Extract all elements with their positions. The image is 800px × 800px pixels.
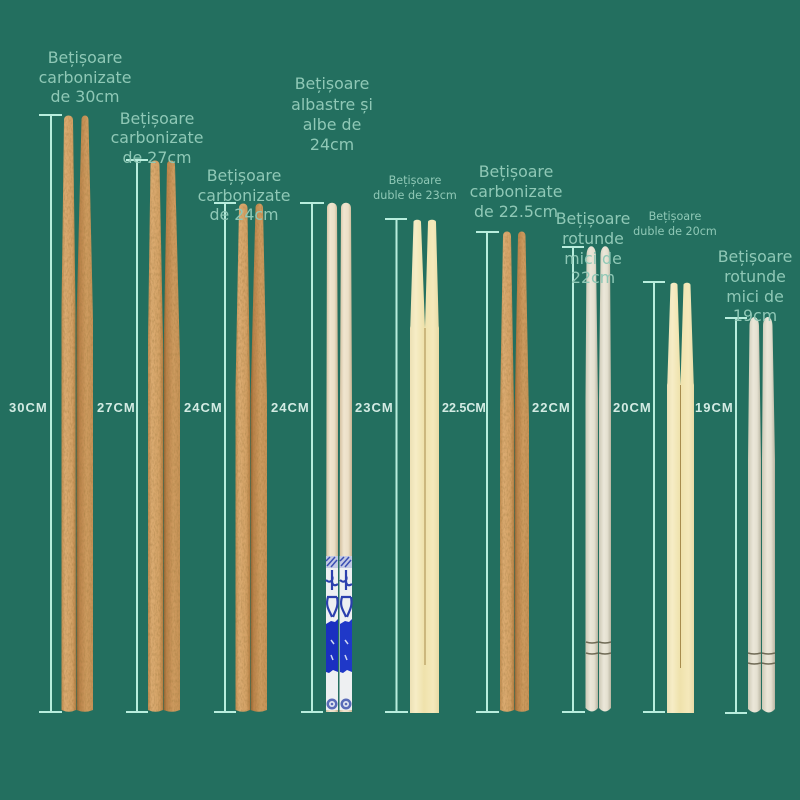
label: carbonized 24cm: Bețișoare — [207, 166, 281, 185]
label: round small 22cm: 22cm — [571, 268, 615, 287]
chopstick set: double 20cm — [613, 282, 694, 713]
label: round small 19cm: rotunde — [724, 267, 786, 286]
joined chopsticks — [410, 220, 439, 713]
label: round small 22cm: Bețișoare — [556, 209, 630, 228]
ruler: 20cm — [643, 282, 665, 712]
label: carbonized 27cm: Bețișoare — [120, 109, 194, 128]
chopstick set: blue and white 24cm — [271, 203, 352, 712]
chopsticks — [748, 317, 775, 712]
chopstick set: double 23cm — [355, 219, 439, 713]
ruler: 22cm — [562, 247, 585, 712]
label: carbonized 30cm: Bețișoare — [48, 48, 122, 67]
length label: 23CM: 23CM — [355, 400, 394, 415]
ruler: 22.5cm — [476, 232, 499, 712]
length label: 24CM: 24CM — [184, 400, 223, 415]
chopstick set: carbonized 22.5cm — [442, 232, 529, 712]
joined chopsticks — [667, 283, 694, 713]
label: double 23cm: duble de 23cm — [373, 189, 457, 202]
label: carbonized 24cm: de 24cm — [210, 205, 278, 224]
chopsticks — [62, 116, 93, 712]
ruler: 30cm — [39, 115, 62, 712]
label: double 20cm: duble de 20cm — [633, 225, 717, 238]
chopsticks — [236, 204, 267, 712]
porcelain pattern: right — [340, 556, 352, 710]
label: blue and white 24cm: 24cm — [310, 135, 354, 154]
split line — [424, 328, 426, 665]
label: carbonized 22.5cm: carbonizate — [470, 182, 562, 201]
ruler: 19cm — [725, 318, 747, 713]
chopsticks — [148, 160, 180, 712]
label: double 20cm: Bețișoare — [649, 210, 702, 223]
label: carbonized 30cm: carbonizate — [39, 68, 131, 87]
porcelain pattern: left — [326, 556, 338, 710]
label: round small 19cm: Bețișoare — [718, 247, 792, 266]
ruler: 27cm — [126, 160, 148, 712]
label: round small 19cm: 19cm — [733, 306, 777, 325]
label: blue and white 24cm: Bețișoare — [295, 74, 369, 93]
label: round small 22cm: rotunde — [562, 229, 624, 248]
length label: 20CM: 20CM — [613, 400, 652, 415]
label: carbonized 22.5cm: Bețișoare — [479, 162, 553, 181]
label: carbonized 22.5cm: de 22.5cm — [474, 202, 558, 221]
length label: 27CM: 27CM — [97, 400, 136, 415]
label: double 23cm: Bețișoare — [389, 174, 442, 187]
label: round small 22cm: mici de — [564, 249, 622, 268]
chopsticks — [586, 246, 611, 712]
label: blue and white 24cm: albe de — [303, 115, 361, 134]
length label: 30CM: 30CM — [9, 400, 48, 415]
label: carbonized 27cm: carbonizate — [111, 128, 203, 147]
groove bands — [586, 642, 611, 654]
ruler: 24cm — [214, 203, 236, 712]
label: carbonized 30cm: de 30cm — [51, 87, 119, 106]
chopstick set: carbonized 27cm — [97, 160, 180, 712]
chopsticks — [500, 232, 529, 712]
length label: 19CM: 19CM — [695, 400, 734, 415]
label: round small 19cm: mici de — [726, 287, 784, 306]
label: carbonized 27cm: de 27cm — [123, 148, 191, 167]
split line — [680, 385, 682, 668]
chopstick set: carbonized 24cm — [184, 203, 267, 712]
length label: 22CM: 22CM — [532, 400, 571, 415]
label: blue and white 24cm: albastre și — [291, 95, 373, 114]
groove bands — [748, 653, 775, 664]
length label: 22.5CM: 22.5CM — [442, 401, 486, 415]
label: carbonized 24cm: carbonizate — [198, 186, 290, 205]
ruler: 23cm — [385, 219, 408, 712]
ruler: 24cm — [300, 203, 324, 712]
chopstick set: carbonized 30cm — [9, 115, 93, 712]
length label: 24CM: 24CM — [271, 400, 310, 415]
chopstick set: round small 22cm — [532, 246, 611, 712]
chopsticks — [326, 203, 352, 712]
chopstick set: round small 19cm — [695, 317, 775, 713]
